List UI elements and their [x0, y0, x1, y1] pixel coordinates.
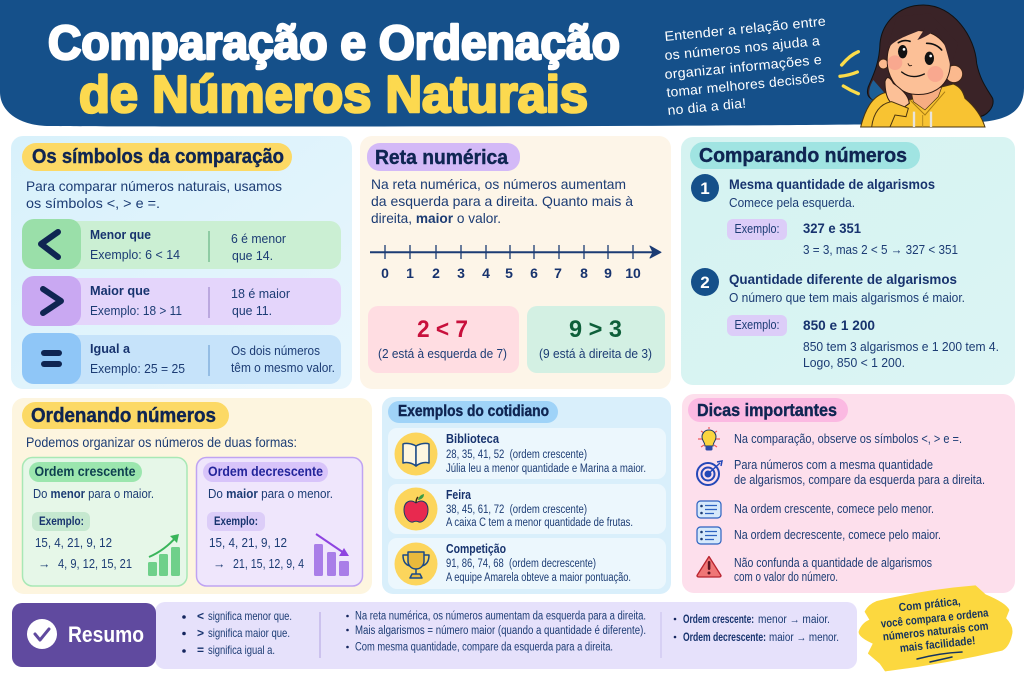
- number line: 8: [580, 265, 588, 281]
- summary column 1: significa menor que.: [208, 609, 292, 623]
- rule 2: 850 tem 3 algarismos e 1 200 tem 4.: [803, 339, 999, 354]
- example: 9 maior que 3: [527, 306, 665, 373]
- rule 2: O número que tem mais algarismos é maior.: [729, 291, 965, 305]
- icon: trophy: [403, 552, 429, 578]
- number line: 9: [604, 265, 612, 281]
- intro handwritten text: tomar melhores decisões: [666, 70, 826, 100]
- heading pill: Comparando números: [699, 145, 907, 167]
- summary column 3: Ordem decrescente:: [683, 632, 766, 644]
- number line: [370, 245, 661, 281]
- card: ordem decrescente: →: [213, 557, 226, 571]
- card: competição: 91, 86, 74, 68 (ordem decrescente): [446, 558, 596, 570]
- row: maior que: que 11.: [232, 303, 272, 318]
- number line: 10: [625, 265, 641, 281]
- row: maior que: 18 é maior: [231, 286, 291, 301]
- icon: girl thinking: [840, 5, 993, 127]
- heading pill: Os símbolos da comparação: [32, 146, 284, 168]
- rule 2: Exemplo:: [734, 318, 780, 332]
- intro handwritten text: Entender a relação entre: [664, 14, 827, 44]
- row: menor que: Exemplo: 6 < 14: [90, 247, 180, 262]
- number line: 4: [482, 265, 490, 281]
- intro text: Para comparar números naturais, usamos: [26, 178, 282, 194]
- row: menor que: Menor que: [90, 227, 151, 242]
- card: biblioteca: Biblioteca: [446, 431, 500, 446]
- number line: 2: [432, 265, 440, 281]
- tip 4: Na ordem decrescente, comece pelo maior.: [734, 528, 941, 542]
- card: ordem decrescente: Exemplo:: [214, 514, 258, 528]
- explanation text: Na reta numérica, os números aumentam: [371, 176, 626, 192]
- icon: rising bars: [148, 534, 180, 576]
- rule 2: [691, 268, 999, 370]
- card: ordem decrescente: [196, 458, 362, 586]
- tip 2: de algarismos, compare da esquerda para a direita.: [734, 473, 985, 487]
- summary strip: [12, 602, 857, 669]
- panel: comparando números: [681, 137, 1015, 385]
- tip 2: Para números com a mesma quantidade: [734, 458, 933, 472]
- rule 1: 1: [700, 179, 710, 198]
- card: competição: Competição: [446, 541, 506, 556]
- tip 3: Na ordem crescente, comece pelo menor.: [734, 502, 934, 516]
- card: ordem decrescente: Ordem decrescente: [208, 463, 323, 479]
- number line: 3: [457, 265, 465, 281]
- intro handwritten text: no dia a dia!: [667, 95, 747, 118]
- panel: reta numérica: [360, 136, 671, 389]
- row: maior que: [22, 276, 341, 326]
- panel: ordenando números: [12, 398, 372, 594]
- icon: checklist 1: [697, 501, 721, 518]
- summary column 1: =: [197, 643, 204, 657]
- card: biblioteca: 28, 35, 41, 52 (ordem crescente): [446, 449, 587, 461]
- card: ordem crescente: Exemplo:: [39, 514, 84, 528]
- summary column 1: <: [197, 609, 204, 623]
- card: ordem decrescente: 15, 4, 21, 9, 12: [209, 536, 287, 550]
- card: ordem crescente: 15, 4, 21, 9, 12: [35, 536, 112, 550]
- explanation text: da esquerda para a direita. Quanto mais à: [371, 193, 633, 209]
- icon: apple: [404, 494, 428, 522]
- rule 1: Exemplo:: [734, 222, 780, 236]
- card: ordem crescente: 4, 9, 12, 15, 21: [58, 557, 132, 571]
- intro text: os símbolos <, > e =.: [26, 195, 160, 211]
- panel: dicas importantes: [682, 394, 1015, 593]
- card: ordem crescente: →: [38, 557, 50, 571]
- summary column 2: Mais algarismos = número maior (quando a quantidade é diferente).: [355, 625, 646, 637]
- summary column 2: Na reta numérica, os números aumentam da esquerda para a direita.: [355, 610, 646, 622]
- heading pill: Reta numérica: [375, 147, 509, 169]
- row: igual a: Os dois números: [231, 343, 320, 358]
- rule 1: Mesma quantidade de algarismos: [729, 177, 935, 192]
- row: igual a: Igual a: [90, 341, 131, 356]
- tip 5: com o valor do número.: [734, 570, 838, 584]
- rule 2: 850 e 1 200: [803, 318, 875, 333]
- resumo badge: Resumo: [68, 622, 144, 647]
- card: ordem crescente: Ordem crescente: [34, 463, 136, 479]
- card: ordem crescente: [22, 458, 187, 586]
- summary column 3: maior → menor.: [769, 632, 839, 644]
- tip 5: [734, 556, 932, 584]
- example: 2 menor que 7: (2 está à esquerda de 7): [378, 346, 507, 361]
- row: maior que: Exemplo: 18 > 11: [90, 303, 182, 318]
- heading pill: Ordenando números: [31, 405, 216, 427]
- rule 1: Comece pela esquerda.: [729, 196, 855, 210]
- summary column 1: significa igual a.: [208, 643, 275, 657]
- row: maior que: Maior que: [90, 283, 150, 298]
- tip 5: Não confunda a quantidade de algarismos: [734, 556, 932, 570]
- rule 1: 3 = 3, mas 2 < 5 → 327 < 351: [803, 242, 958, 257]
- icon: light bulb: [698, 427, 720, 450]
- summary column 1: significa maior que.: [208, 626, 290, 640]
- row: menor que: que 14.: [232, 248, 273, 263]
- callout: com prática: [859, 586, 1012, 671]
- example: 2 menor que 7: 2 < 7: [417, 316, 468, 343]
- summary column 1: >: [197, 626, 204, 640]
- summary column 3: [674, 614, 839, 644]
- summary column 3: Ordem crescente:: [683, 614, 754, 626]
- summary column 1: [182, 609, 292, 657]
- summary column 2: [346, 610, 646, 654]
- row: menor que: [22, 219, 341, 269]
- card: ordem decrescente: Do maior para o menor.: [208, 487, 333, 501]
- icon: falling bars: [314, 534, 349, 576]
- resumo badge: [12, 603, 156, 667]
- icon: checklist 2: [697, 527, 721, 544]
- panel: os símbolos da comparação: [11, 136, 352, 389]
- heading pill: Dicas importantes: [697, 400, 837, 420]
- card: competição: A equipe Amarela obteve a maior pontuação.: [446, 572, 631, 584]
- number line: 6: [530, 265, 538, 281]
- example: 9 maior que 3: 9 > 3: [569, 316, 622, 343]
- card: feira: [388, 484, 666, 534]
- callout: com prática: números naturais com: [882, 621, 989, 644]
- number line: 0: [381, 265, 389, 281]
- example: 9 maior que 3: (9 está à direita de 3): [539, 346, 652, 361]
- header banner: [0, 0, 1024, 127]
- heading pill: Exemplos do cotidiano: [398, 403, 549, 420]
- number line: 5: [505, 265, 513, 281]
- icon: target: [697, 461, 722, 485]
- card: competição: [388, 538, 666, 589]
- icon: warning: [697, 556, 721, 577]
- card: feira: A caixa C tem a menor quantidade de frutas.: [446, 517, 633, 529]
- callout: com prática: mais facilidade!: [899, 635, 976, 655]
- row: igual a: Exemplo: 25 = 25: [90, 361, 185, 376]
- panel: exemplos do cotidiano: [382, 397, 671, 594]
- card: feira: 38, 45, 61, 72 (ordem crescente): [446, 504, 587, 516]
- intro handwritten text: organizar informações e: [664, 52, 823, 82]
- rule 2: Logo, 850 < 1 200.: [803, 355, 905, 370]
- rule 1: [691, 174, 958, 257]
- summary column 2: Com mesma quantidade, compare da esquerda para a direita.: [355, 642, 613, 654]
- card: biblioteca: Júlia leu a menor quantidade e Marina a maior.: [446, 463, 646, 475]
- card: ordem decrescente: 21, 15, 12, 9, 4: [233, 557, 304, 571]
- rule 2: 2: [700, 273, 710, 292]
- number line: 1: [406, 265, 414, 281]
- title line 1: Comparação e Ordenação: [48, 17, 620, 70]
- title line 2: de Números Naturais: [79, 66, 588, 124]
- rule 2: Quantidade diferente de algarismos: [729, 272, 957, 287]
- tip 2: [734, 458, 985, 487]
- card: feira: Feira: [446, 487, 472, 502]
- callout: com prática: Com prática,: [898, 596, 961, 614]
- row: igual a: [22, 333, 341, 384]
- intro handwritten text: [664, 14, 827, 118]
- callout: com prática: você compara e ordena: [880, 607, 990, 631]
- summary column 3: menor → maior.: [758, 614, 830, 626]
- number line: 7: [554, 265, 562, 281]
- intro handwritten text: os números nos ajuda a: [664, 33, 821, 63]
- row: igual a: têm o mesmo valor.: [231, 360, 335, 375]
- intro text: Podemos organizar os números de duas formas:: [26, 434, 297, 450]
- example: 2 menor que 7: [368, 306, 519, 373]
- card: ordem crescente: Do menor para o maior.: [33, 487, 154, 501]
- card: biblioteca: [388, 428, 666, 479]
- heading pill: [388, 401, 558, 423]
- intro text: [26, 178, 282, 211]
- explanation text: [371, 176, 633, 226]
- icon: book: [403, 443, 429, 466]
- rule 1: 327 e 351: [803, 221, 861, 236]
- tip 1: Na comparação, observe os símbolos <, > e =.: [734, 432, 962, 446]
- row: menor que: 6 é menor: [231, 231, 287, 246]
- explanation text: direita, maior o valor.: [371, 210, 501, 226]
